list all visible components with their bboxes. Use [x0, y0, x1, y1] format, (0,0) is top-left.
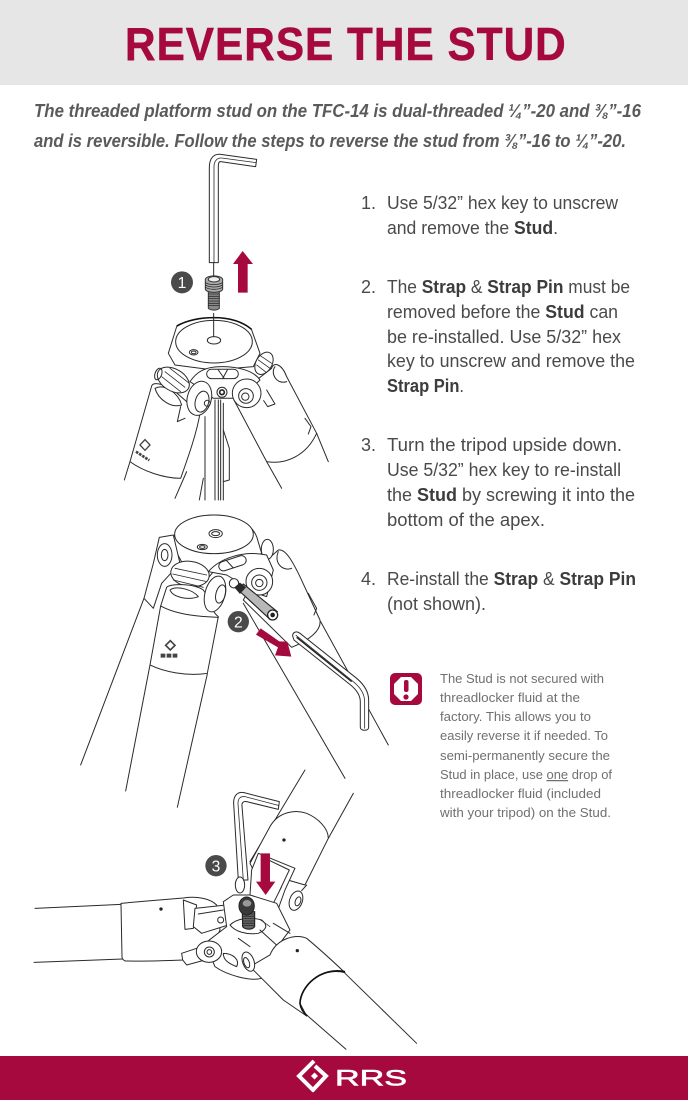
step 3 text: Turn the tripod upside down.	[387, 435, 622, 455]
step number 1	[171, 271, 193, 293]
step 3 text: 3.	[361, 435, 376, 455]
note text: easily reverse it if needed. To	[440, 729, 608, 743]
upper right leg lines	[250, 770, 353, 862]
header band with title	[0, 0, 688, 85]
left leg	[34, 897, 228, 962]
arrow down	[256, 853, 275, 895]
plate and slot	[208, 554, 273, 597]
footer band with logo: RRS	[335, 1066, 407, 1090]
note text: Stud in place, use one drop of	[440, 768, 613, 782]
step number 3: 3	[212, 858, 221, 875]
strap pin	[229, 579, 278, 620]
step number 2	[228, 611, 249, 632]
step 2 text: be re-installed. Use 5/32” hex	[387, 327, 621, 347]
left leg collar	[124, 384, 200, 480]
step 4 text: Re-install the Strap & Strap Pin	[387, 569, 636, 589]
stud bolt	[239, 897, 255, 929]
step 3 text: Use 5/32” hex key to re-install	[387, 460, 621, 480]
icon: RRS diamond mark	[299, 1061, 326, 1091]
step 3 text	[361, 435, 635, 530]
step number 3	[205, 855, 227, 876]
step 1 text: and remove the Stud.	[387, 218, 558, 238]
hanging strap behind apex	[175, 400, 229, 500]
step 4 text	[361, 569, 636, 614]
step 2 text	[361, 277, 635, 396]
step number 1: 1	[178, 275, 186, 292]
intro text: and is reversible. Follow the steps to reverse the stud from ⅜”-16 to ¼”-20.	[34, 130, 626, 151]
ribbed knob	[169, 559, 211, 589]
right knob	[246, 568, 273, 595]
left leg collar	[150, 585, 218, 674]
header band with title: REVERSE THE STUD	[125, 19, 567, 70]
hex key	[293, 632, 369, 730]
arrow up	[233, 251, 253, 293]
note text: threadlocker fluid at the	[440, 691, 580, 705]
note text: semi-permanently secure the	[440, 749, 610, 763]
step 1 text	[361, 193, 619, 238]
lower hub plate	[205, 895, 290, 979]
arrow down right	[256, 628, 291, 657]
step 4 text: 4.	[361, 569, 376, 589]
note text: threadlocker fluid (included	[440, 787, 601, 801]
step 4 text: (not shown).	[387, 594, 486, 614]
central plate	[190, 367, 260, 398]
apex body	[172, 515, 273, 580]
hex key	[234, 792, 279, 893]
logo mark on collar	[136, 440, 150, 460]
left side knob	[144, 535, 180, 608]
icon: warning badge	[390, 673, 422, 705]
lower left knob	[182, 941, 222, 965]
step 1 text: Use 5/32” hex key to unscrew	[387, 193, 619, 213]
step 2 text: Strap Pin.	[387, 376, 464, 396]
note text: The Stud is not secured with	[440, 672, 604, 686]
right leg collar	[234, 365, 328, 488]
illustration: step 1 remove stud	[124, 154, 328, 500]
step 2 text: key to unscrew and remove the	[387, 351, 635, 371]
stud	[205, 276, 223, 310]
left ribbed knob	[153, 362, 194, 398]
intro text	[34, 100, 642, 151]
step 3 text: the Stud by screwing it into the	[387, 485, 635, 505]
left knob	[201, 574, 229, 614]
note text	[439, 672, 613, 820]
step 3 text: bottom of the apex.	[387, 510, 545, 530]
intro text: The threaded platform stud on the TFC-14 is dual-threaded ¼”-20 and ⅜”-16	[34, 100, 642, 121]
right leg collar	[243, 550, 320, 647]
step 2 text: 2.	[361, 277, 376, 297]
step number 2: 2	[234, 614, 243, 631]
illustration: step 2 remove strap pin	[81, 515, 388, 807]
note text: factory. This allows you to	[440, 710, 591, 724]
left knob	[177, 378, 215, 422]
step 2 text: removed before the Stud can	[387, 302, 618, 322]
long leg lines	[81, 598, 388, 807]
step 1 text: 1.	[361, 193, 376, 213]
upper right leg	[250, 812, 328, 913]
step 2 text: The Strap & Strap Pin must be	[387, 277, 630, 297]
right knob	[232, 379, 275, 408]
footer band with logo	[0, 1056, 688, 1100]
illustration: step 3 install stud	[34, 770, 417, 1049]
apex body	[168, 318, 277, 378]
lower right leg	[240, 936, 417, 1049]
hex key and guide line	[209, 154, 257, 337]
note text: with your tripod) on the Stud.	[439, 806, 611, 820]
